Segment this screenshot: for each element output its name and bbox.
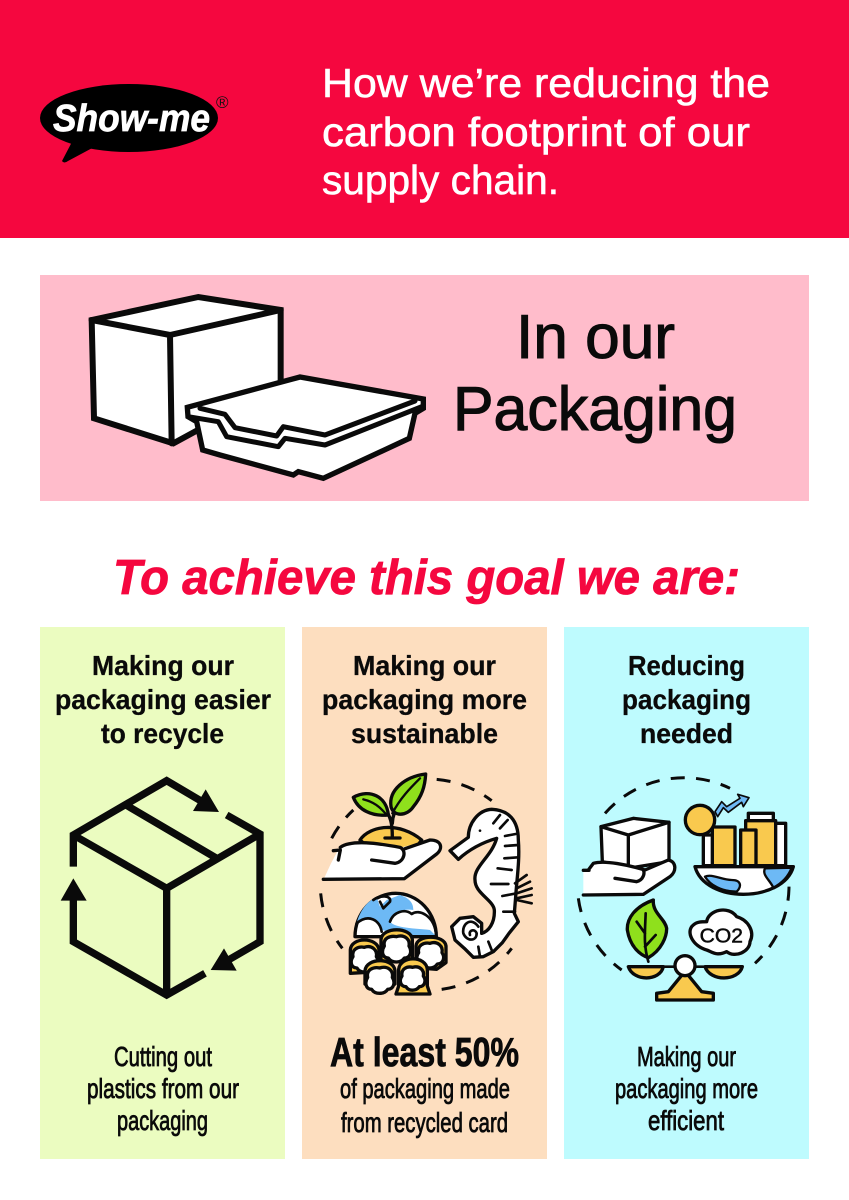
heading: to recycle	[101, 718, 224, 749]
CO2 cloud	[690, 910, 752, 954]
panel heading: Packaging	[453, 375, 737, 444]
panel: more sustainable	[302, 627, 547, 1159]
heading	[322, 650, 527, 749]
icon: recycling box	[61, 781, 260, 995]
icon: sustainable materials circle	[321, 774, 532, 994]
panel: reducing packaging	[564, 627, 809, 1159]
caption: packaging more	[615, 1073, 758, 1104]
heading: packaging	[622, 684, 751, 715]
heading: needed	[640, 718, 733, 749]
caption: of packaging made	[340, 1073, 510, 1104]
balance scale	[628, 956, 742, 1000]
panel heading	[453, 303, 737, 444]
caption	[87, 1041, 239, 1136]
heading: packaging more	[322, 684, 527, 715]
globe and cotton	[350, 893, 446, 994]
title: supply chain.	[322, 157, 559, 203]
box in hand	[583, 818, 675, 895]
heading: Making our	[92, 650, 234, 681]
subheading: To achieve this goal we are:	[113, 551, 740, 605]
logo: Show-me speech bubble: ®	[216, 93, 229, 112]
cotton bolls	[350, 940, 379, 973]
icon: cardboard box and tray	[92, 297, 423, 478]
statistic: At least 50%	[330, 1029, 519, 1075]
caption: packaging	[117, 1105, 208, 1136]
leaf	[627, 900, 667, 962]
title: carbon footprint of our	[322, 109, 750, 155]
heading	[622, 650, 751, 749]
seahorse	[450, 809, 532, 957]
caption	[615, 1041, 758, 1136]
caption: efficient	[648, 1105, 724, 1136]
logo: Show-me speech bubble: Show-me	[53, 98, 210, 140]
panel heading: In our	[516, 303, 675, 372]
sprout in hand	[323, 774, 441, 880]
caption: from recycled card	[341, 1107, 508, 1138]
panel: in our packaging	[40, 275, 809, 501]
logo: Show-me speech bubble	[40, 84, 229, 162]
title: How we’re reducing the	[322, 60, 770, 106]
header band	[0, 0, 849, 238]
caption: Making our	[637, 1041, 736, 1072]
caption: plastics from our	[87, 1073, 239, 1104]
heading: sustainable	[351, 718, 498, 749]
heading: Reducing	[628, 650, 745, 681]
city on globe	[685, 794, 793, 894]
heading: Making our	[353, 650, 496, 681]
CO2 cloud: CO2	[700, 925, 743, 948]
panel: easier to recycle	[40, 627, 285, 1159]
title	[322, 60, 770, 203]
caption: Cutting out	[114, 1041, 212, 1072]
heading	[55, 650, 271, 749]
heading: packaging easier	[55, 684, 271, 715]
icon: efficiency circle	[578, 778, 793, 1000]
caption	[330, 1029, 519, 1138]
